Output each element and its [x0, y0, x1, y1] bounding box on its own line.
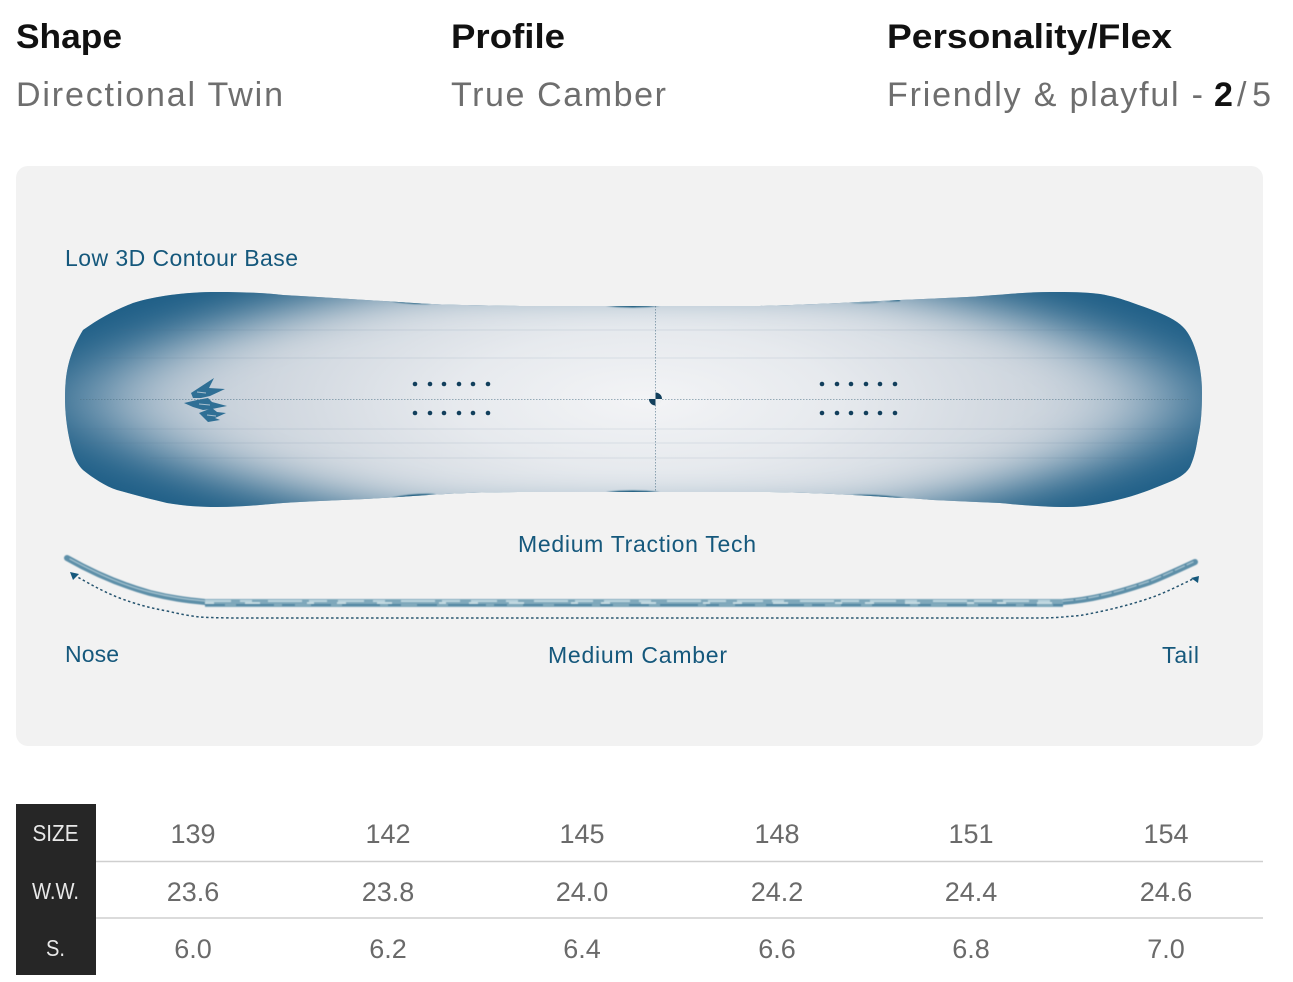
row: setback values: [174, 934, 1185, 964]
heading: personality and flex: 2: [1214, 76, 1233, 114]
table row header: S.: [46, 935, 65, 961]
label: medium traction tech: Medium Traction Tech: [518, 531, 756, 557]
icon: center mark: [649, 392, 662, 406]
row: waist width values: 24.4: [945, 877, 997, 907]
row: setback values: 6.2: [369, 934, 407, 964]
row: setback values: 7.0: [1147, 934, 1185, 964]
row: size values: 139: [170, 819, 216, 849]
row: waist width values: 24.2: [751, 877, 803, 907]
heading: shape: [16, 18, 283, 114]
arrow: camber curve: [70, 572, 1199, 618]
row: size values: 145: [559, 819, 605, 849]
heading: profile: True Camber: [451, 76, 666, 114]
row: setback values: 6.6: [758, 934, 796, 964]
heading: profile: Profile: [451, 18, 565, 56]
row: waist width values: [167, 877, 1192, 907]
row: setback values: 6.4: [563, 934, 601, 964]
row: size values: 142: [365, 819, 411, 849]
binding inserts: [413, 382, 897, 415]
row: waist width values: 24.0: [556, 877, 608, 907]
snowboard top view: [60, 282, 1210, 518]
row: waist width values: 24.6: [1140, 877, 1192, 907]
row: size values: [170, 819, 1189, 849]
heading: shape: Shape: [16, 18, 122, 56]
table row header: W.W.: [32, 878, 79, 904]
row: waist width values: 23.8: [362, 877, 414, 907]
table row header: [16, 804, 96, 975]
panel: board diagram: [16, 166, 1263, 746]
label: tail: Tail: [1162, 642, 1199, 668]
heading: personality and flex: [887, 18, 1271, 114]
heading: personality and flex: Personality/Flex: [887, 18, 1172, 56]
size table: [16, 804, 1263, 975]
row: setback values: 6.8: [952, 934, 990, 964]
label: low 3D contour base: Low 3D Contour Base: [65, 245, 298, 271]
row: waist width values: 23.6: [167, 877, 219, 907]
table row header: SIZE: [32, 820, 78, 846]
row: size values: 148: [754, 819, 800, 849]
heading: personality and flex: Friendly & playful -: [887, 76, 1203, 114]
label: medium camber: Medium Camber: [548, 642, 727, 668]
row: size values: 151: [948, 819, 994, 849]
row: size values: 154: [1143, 819, 1189, 849]
row: setback values: 6.0: [174, 934, 212, 964]
heading: shape: Directional Twin: [16, 76, 283, 114]
heading: profile: [451, 18, 666, 114]
icon: bird logo: [184, 378, 227, 422]
label: nose: Nose: [65, 641, 119, 667]
snowboard side profile: [67, 558, 1195, 605]
heading: personality and flex: /5: [1237, 76, 1271, 114]
